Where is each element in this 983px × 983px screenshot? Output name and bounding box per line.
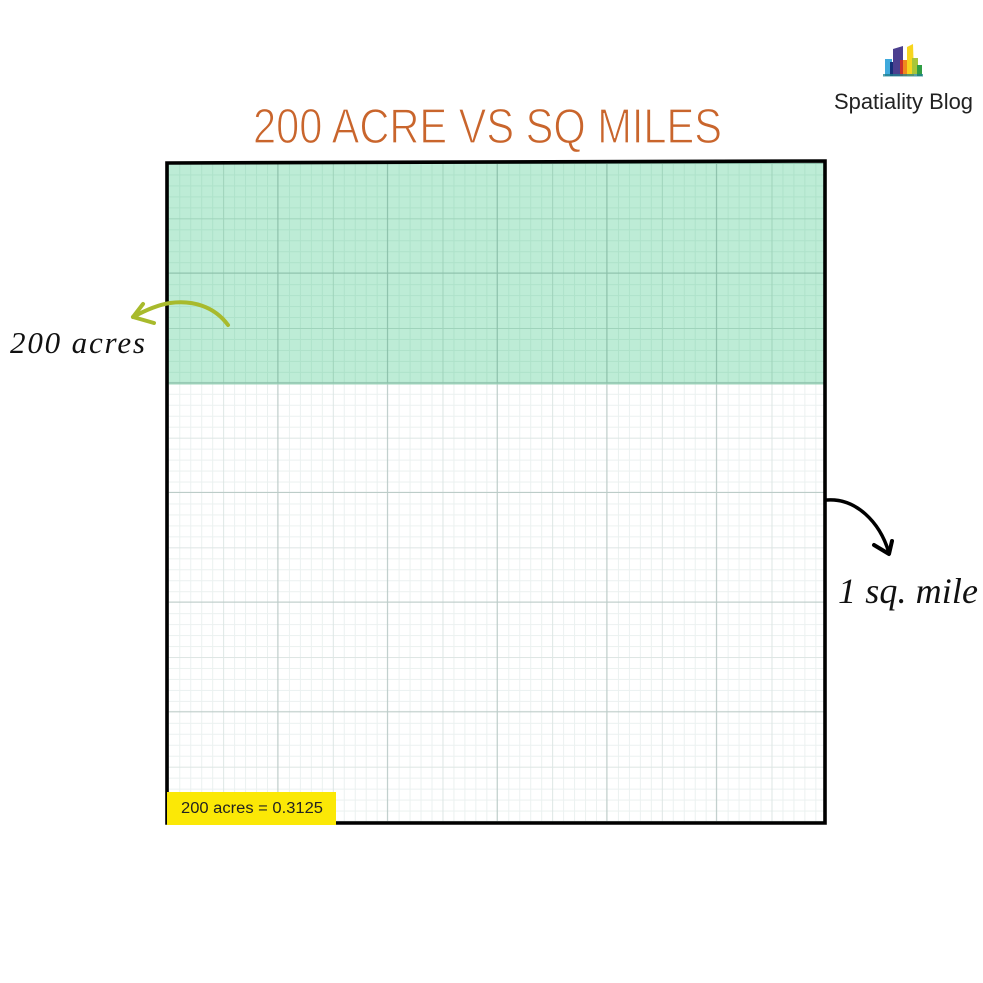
callout: yellow value label: 200 acres = 0.3125 <box>181 800 323 817</box>
label: 200 acres: 200 acres <box>10 325 145 360</box>
area: remaining white grid <box>168 384 826 822</box>
area: 200 acres green shaded <box>168 163 826 384</box>
callout: yellow value label <box>167 792 336 825</box>
logo text: Spatiality Blog <box>834 89 973 114</box>
frame: 1 square mile outline <box>167 161 825 823</box>
chart: 1 square mile grid with 200 acre area <box>167 161 826 823</box>
arrow: black arrow to 1 sq. mile <box>827 500 892 554</box>
logo icon: colourful skyline <box>883 44 923 76</box>
label: 1 sq. mile: 1 sq. mile <box>838 571 978 611</box>
title: 200 ACRE VS SQ MILES <box>253 100 722 154</box>
arrow: green arrow to 200 acres <box>133 302 228 325</box>
